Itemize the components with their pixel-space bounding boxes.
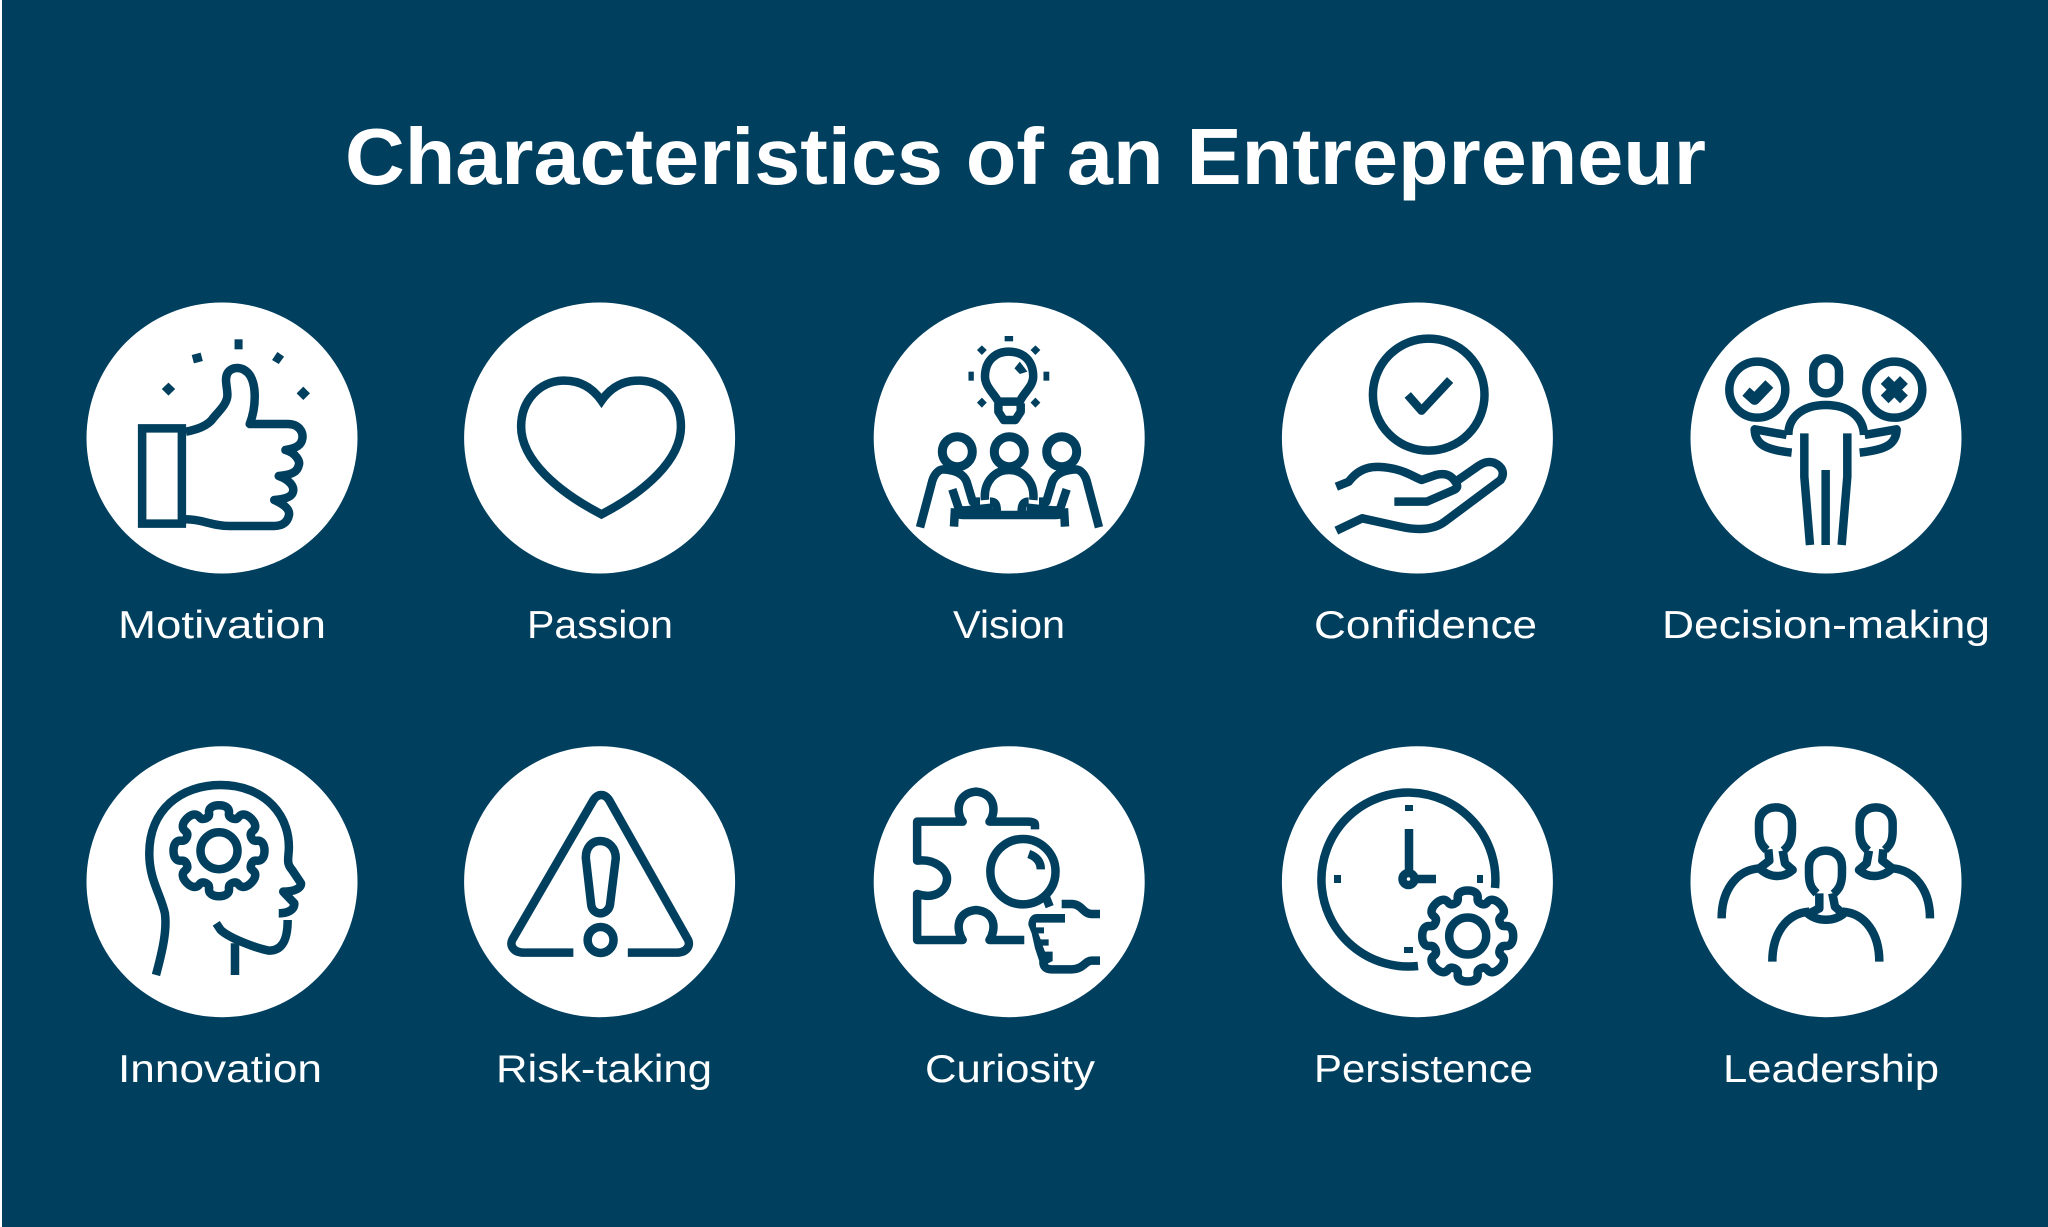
label: Leadership: Leadership	[1723, 1048, 1939, 1091]
panel: Persistence	[1282, 746, 1553, 1091]
panel: Leadership	[1690, 746, 1962, 1091]
label: Confidence: Confidence	[1314, 604, 1537, 647]
panel: Innovation	[86, 746, 358, 1091]
icon: team with light bulb	[920, 336, 1099, 527]
icon: heart	[521, 381, 681, 514]
icon: head with gear	[149, 785, 301, 975]
icon: thumbs up	[142, 339, 310, 526]
icon: three people	[1722, 807, 1930, 962]
label: Vision: Vision	[953, 604, 1065, 647]
label: Persistence: Persistence	[1314, 1048, 1533, 1091]
icon: hand holding check mark	[1336, 339, 1503, 531]
icon: puzzle piece and magnifier	[917, 792, 1100, 969]
panel: Passion	[464, 302, 735, 647]
icon: person weighing yes or no	[1729, 358, 1922, 545]
panel: Confidence	[1282, 302, 1553, 647]
label: Risk-taking: Risk-taking	[496, 1048, 712, 1091]
label: Decision-making: Decision-making	[1662, 604, 1990, 647]
panel: Risk-taking	[464, 746, 735, 1091]
panel: Curiosity	[874, 746, 1145, 1091]
label: Motivation: Motivation	[118, 604, 326, 647]
icon: warning triangle	[511, 795, 689, 953]
panel: Motivation	[86, 302, 358, 647]
label: Innovation: Innovation	[118, 1048, 322, 1091]
icon: clock with gear	[1321, 793, 1513, 982]
panel: Decision-making	[1662, 302, 1990, 647]
panel: Vision	[874, 302, 1145, 647]
label: Curiosity: Curiosity	[925, 1048, 1096, 1091]
label: Passion: Passion	[527, 604, 673, 647]
title: Characteristics of an Entrepreneur	[345, 112, 1706, 201]
